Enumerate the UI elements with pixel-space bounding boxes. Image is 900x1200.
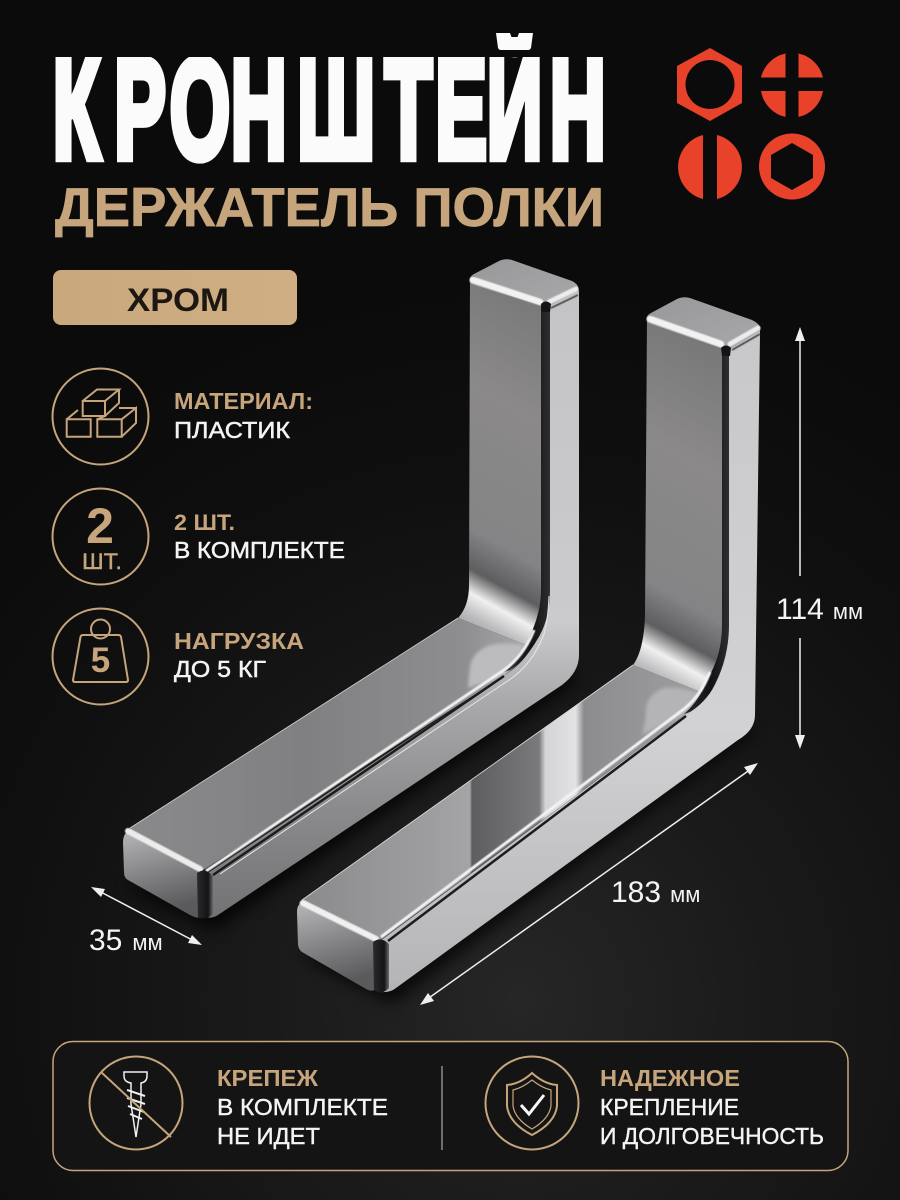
spec: material: ПЛАСТИК bbox=[174, 417, 291, 443]
right bracket bbox=[297, 297, 760, 993]
badge: chrome colour bbox=[53, 270, 297, 325]
icon: weight: 5 bbox=[91, 641, 110, 680]
top cap bbox=[646, 297, 760, 350]
arrow: height bbox=[795, 327, 805, 749]
horizontal flange bbox=[299, 665, 703, 941]
label: 114 mm: 114 мм bbox=[776, 593, 863, 626]
spec: load: НАГРУЗКА bbox=[174, 628, 304, 654]
text: reliable mounting: НАДЕЖНОЕ bbox=[600, 1065, 740, 1091]
icon: 2 pieces: 2 bbox=[86, 498, 114, 554]
icon: weight bbox=[52, 608, 148, 704]
icon: 2 pieces: ШТ. bbox=[82, 549, 122, 574]
top cap bbox=[470, 259, 578, 307]
text: fasteners not included: НЕ ИДЕТ bbox=[217, 1123, 320, 1149]
icon: shield bbox=[486, 1056, 578, 1150]
end face bbox=[123, 830, 200, 918]
text: fasteners not included: В КОМПЛЕКТЕ bbox=[217, 1094, 388, 1120]
spec: material bbox=[52, 368, 313, 464]
spec: load bbox=[52, 608, 304, 704]
horizontal flange bbox=[126, 618, 526, 872]
spec: quantity: В КОМПЛЕКТЕ bbox=[174, 537, 345, 563]
chrome seam bbox=[206, 306, 550, 875]
spec: material: МАТЕРИАЛ: bbox=[174, 388, 313, 414]
text: fasteners not included bbox=[217, 1065, 388, 1149]
text: reliable mounting bbox=[600, 1065, 824, 1149]
reflection bbox=[468, 644, 523, 688]
logo: fastener icons bbox=[677, 48, 825, 200]
outer edge bbox=[380, 328, 760, 992]
icon: no screw bbox=[90, 1056, 182, 1150]
label: 35 mm: 35 мм bbox=[89, 924, 163, 957]
outer edge bbox=[205, 288, 579, 918]
label: 183 mm: 183 мм bbox=[611, 876, 700, 909]
chrome seam bbox=[381, 349, 729, 941]
spec: quantity: 2 ШТ. bbox=[174, 510, 235, 535]
title: КРОНШТЕЙН bbox=[53, 27, 606, 189]
arrow: length bbox=[420, 763, 758, 1005]
floor shadows bbox=[125, 670, 756, 1003]
bottom panel bbox=[53, 1042, 848, 1170]
left bracket bbox=[123, 259, 579, 918]
reflection bbox=[642, 688, 700, 735]
text: reliable mounting: И ДОЛГОВЕЧНОСТЬ bbox=[600, 1123, 824, 1149]
end face bbox=[297, 902, 374, 991]
vertical flange bbox=[633, 318, 725, 693]
text: fasteners not included: КРЕПЕЖ bbox=[217, 1065, 318, 1091]
arrow: width bbox=[91, 887, 202, 945]
icon: cubes bbox=[52, 368, 148, 464]
text: reliable mounting: КРЕПЛЕНИЕ bbox=[600, 1094, 739, 1120]
icon: 2 pieces bbox=[52, 488, 148, 584]
subtitle: ДЕРЖАТЕЛЬ ПОЛКИ bbox=[55, 176, 604, 238]
spec: load: ДО 5 КГ bbox=[174, 656, 267, 682]
vertical flange bbox=[458, 279, 545, 645]
spec: quantity bbox=[52, 488, 345, 584]
badge: chrome colour: ХРОМ bbox=[127, 282, 229, 318]
